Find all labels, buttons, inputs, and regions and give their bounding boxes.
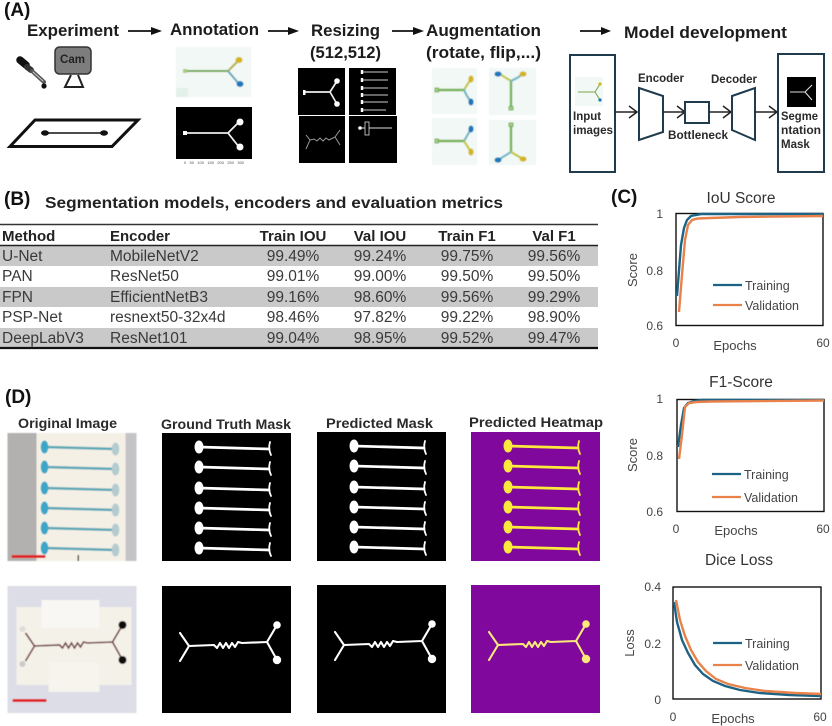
chart: Dice loss: 0.2 <box>644 637 661 651</box>
predicted heatmap row 1 <box>471 432 600 561</box>
annotation mask image <box>176 107 252 165</box>
row DeepLabV3: 99.04% <box>267 330 319 347</box>
bottleneck: Bottleneck <box>668 130 729 142</box>
chart: F1 score: 0.8 <box>646 449 663 463</box>
heading: Augmentation <box>426 22 541 62</box>
predicted heatmap row 2 <box>471 585 600 713</box>
model diagram: encoder decoder <box>570 54 824 172</box>
panel A: workflow <box>4 0 824 172</box>
chart: F1 score: F1-Score <box>709 374 773 391</box>
panel label B: (B) <box>4 189 30 210</box>
header row: Method <box>2 228 55 245</box>
header row: Val IOU <box>354 228 406 245</box>
predicted mask row 1 <box>317 432 446 561</box>
chart: IoU score: 0.8 <box>646 264 663 278</box>
chart: Dice loss: 60 <box>813 710 827 724</box>
decoder <box>711 74 758 140</box>
row U-Net <box>2 248 580 265</box>
row FPN: EfficientNetB3 <box>110 289 208 306</box>
column titles: Original Image <box>18 416 118 431</box>
row U-Net: U-Net <box>2 248 43 265</box>
panel label D: (D) <box>5 387 31 408</box>
header row: Encoder <box>110 228 170 245</box>
panel D: segmentation results <box>5 387 603 713</box>
input images box: Input <box>573 111 601 123</box>
annotated chip image <box>176 47 251 97</box>
chart: IoU score: 1 <box>656 207 663 221</box>
input images box: images <box>573 125 613 137</box>
ground truth mask row 2 <box>162 586 291 713</box>
row PSP-Net: resnext50-32x4d <box>110 309 225 326</box>
heading: Resizing (512,512): (512,512) <box>310 44 381 62</box>
chart: F1 score: 60 <box>816 522 830 536</box>
row PSP-Net: 97.82% <box>354 309 406 326</box>
arrow: encoder to bottleneck <box>663 106 685 118</box>
row U-Net: 99.56% <box>528 248 580 265</box>
row U-Net: 99.75% <box>441 248 493 265</box>
heading: Augmentation: Augmentation <box>426 22 541 40</box>
row PAN: 99.50% <box>441 268 493 285</box>
row U-Net: 99.49% <box>267 248 319 265</box>
heading: Resizing (512,512): Resizing <box>311 22 380 40</box>
original image row 2 <box>8 586 136 713</box>
chart: IoU score: Epochs <box>713 338 757 353</box>
arrow: bottleneck to decoder <box>709 106 731 118</box>
row DeepLabV3 <box>2 330 580 347</box>
chart: F1 score: Score <box>625 438 640 472</box>
chart: F1 score: Validation <box>744 491 798 505</box>
row PSP-Net: 99.22% <box>441 309 493 326</box>
icon: microfluidic slide <box>10 120 138 146</box>
resized tile 4 <box>349 116 397 163</box>
header row: Train F1 <box>438 228 496 245</box>
chart: Dice loss: 0 <box>670 710 677 724</box>
row DeepLabV3: 99.47% <box>528 330 580 347</box>
chart: Dice loss: Dice Loss <box>705 552 773 569</box>
segmentation mask box: Mask <box>781 139 810 151</box>
segmentation mask box: Segme <box>781 111 818 123</box>
chart: F1 score: 0 <box>673 522 680 536</box>
chart: F1 score: 1 <box>656 392 663 406</box>
augmented image 2 <box>489 68 536 115</box>
chart: F1 score: Epochs <box>714 523 758 538</box>
chart: IoU score: IoU Score <box>707 190 775 207</box>
resized tile 1 <box>298 68 345 115</box>
panel B: metrics table <box>0 189 598 348</box>
segmentation mask box <box>778 54 824 172</box>
chart: Dice loss: 0.4 <box>644 580 661 594</box>
chart: F1 score: Training <box>744 468 789 482</box>
header row: Train IOU <box>260 228 326 245</box>
row FPN: 98.60% <box>354 289 406 306</box>
header row: Val F1 <box>532 228 576 245</box>
chart: F1 score <box>625 374 830 538</box>
row PSP-Net <box>2 309 580 326</box>
chart: Dice loss: Epochs <box>711 711 755 726</box>
heading: Augmentation: (rotate, flip,...) <box>426 44 541 62</box>
arrow: annotation to resizing <box>268 27 299 35</box>
chart: Dice loss <box>622 552 827 726</box>
arrow: experiment to annotation <box>128 27 162 35</box>
heading: Annotation: Annotation <box>170 21 259 39</box>
row PSP-Net: 98.46% <box>267 309 319 326</box>
row PAN: 99.00% <box>354 268 406 285</box>
bottleneck <box>668 102 729 142</box>
augmented image 4 <box>489 120 536 165</box>
row PSP-Net: PSP-Net <box>2 309 63 326</box>
chart: IoU score <box>625 190 830 353</box>
decoder: Decoder <box>711 74 758 86</box>
row PSP-Net: 98.90% <box>528 309 580 326</box>
table <box>0 224 598 348</box>
heading: Experiment: Experiment <box>27 22 120 40</box>
row PAN: 99.50% <box>528 268 580 285</box>
heading: Model development: Model development <box>624 24 788 42</box>
panel label A: (A) <box>4 0 30 21</box>
segmentation mask box: ntation <box>781 125 821 137</box>
chart: Dice loss: 0 <box>654 693 661 707</box>
chart: IoU score: 60 <box>816 336 830 350</box>
icon: camera <box>55 47 91 87</box>
chart: Dice loss: Training <box>745 637 790 651</box>
header row <box>2 228 576 245</box>
row PAN: 99.01% <box>267 268 319 285</box>
resized tile 3 <box>299 116 345 163</box>
arrow: augmentation to model development <box>580 27 611 35</box>
chart: IoU score: Validation <box>745 299 799 313</box>
resized tile 2 <box>349 68 396 115</box>
panel C: training charts <box>611 187 830 726</box>
row FPN: 99.16% <box>267 289 319 306</box>
chart: Dice loss: Validation <box>745 659 799 673</box>
chart: F1 score: 0.6 <box>646 505 663 519</box>
row FPN: 99.56% <box>441 289 493 306</box>
annotation mask image: 0 50 100 150 200 250 300 <box>184 160 245 165</box>
row PAN: ResNet50 <box>110 268 179 285</box>
panel label C: (C) <box>611 187 637 208</box>
column titles: Predicted Heatmap <box>469 415 603 430</box>
predicted mask row 2 <box>317 585 446 713</box>
chart: IoU score: 0.6 <box>646 319 663 333</box>
row PAN <box>2 268 580 285</box>
ground truth mask row 1 <box>162 433 291 561</box>
chart: IoU score: 0 <box>673 336 680 350</box>
row U-Net: MobileNetV2 <box>110 248 199 265</box>
row FPN: FPN <box>2 289 33 306</box>
row DeepLabV3: DeepLabV3 <box>2 330 84 347</box>
icon: dropper <box>20 60 47 89</box>
chart: IoU score: Score <box>625 253 640 287</box>
column titles: Ground Truth Mask <box>161 417 292 432</box>
icon: camera: Cam <box>60 54 85 66</box>
row PAN: PAN <box>2 268 33 285</box>
row DeepLabV3: 99.52% <box>441 330 493 347</box>
row FPN <box>2 289 580 306</box>
column titles: Predicted Mask <box>326 416 434 431</box>
table title: Segmentation models, encoders and evaluation metrics <box>45 195 503 212</box>
row DeepLabV3: ResNet101 <box>110 330 188 347</box>
encoder <box>638 73 685 140</box>
column titles <box>18 415 603 432</box>
augmented image 1 <box>432 68 477 114</box>
row DeepLabV3: 98.95% <box>354 330 406 347</box>
chart: IoU score: Training <box>745 279 790 293</box>
augmented image 3 <box>432 118 477 165</box>
heading: Resizing (512,512) <box>310 22 381 62</box>
row FPN: 99.29% <box>528 289 580 306</box>
arrow: decoder to mask <box>755 106 777 118</box>
original image row 1 <box>8 433 136 561</box>
encoder: Encoder <box>638 73 685 85</box>
row U-Net: 99.24% <box>354 248 406 265</box>
chart: Dice loss: Loss <box>622 629 637 657</box>
input images box <box>570 55 615 172</box>
arrow: input to encoder <box>615 106 637 118</box>
arrow: resizing to augmentation <box>392 27 424 35</box>
